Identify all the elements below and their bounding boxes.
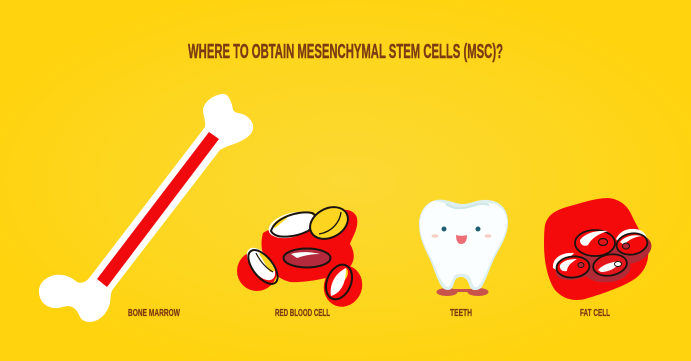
right blush: [484, 234, 492, 238]
red marrow bar: [97, 132, 219, 287]
top right fat cell: [615, 229, 649, 257]
tooth body: [419, 200, 508, 290]
left blush: [432, 234, 438, 238]
bone shape: [39, 94, 253, 322]
bottom left fat cell: [553, 253, 590, 279]
right eye: [476, 226, 480, 232]
label: red blood cell: RED BLOOD CELL: [275, 307, 330, 319]
label: teeth: TEETH: [450, 307, 472, 319]
red blob backdrop: [262, 210, 357, 282]
icon: bone with marrow: [39, 94, 253, 322]
center cell: [284, 248, 330, 268]
icon: fat cells: [544, 198, 651, 300]
gum middle: [450, 289, 476, 292]
label: fat cell: FAT CELL: [580, 307, 610, 319]
mouth: [456, 235, 467, 244]
tooth highlight: [420, 201, 507, 287]
label: bone marrow: BONE MARROW: [128, 307, 180, 319]
left eye: [442, 226, 446, 232]
bottom center fat cell: [591, 252, 629, 278]
dark red cell shadows: [556, 236, 651, 282]
top center fat cell: [575, 230, 615, 256]
icon: smiling tooth: [419, 200, 508, 296]
gum left: [436, 288, 458, 296]
bottom right cell shadow: [318, 260, 368, 312]
top left cell: [266, 207, 318, 243]
icon: red blood cells: [237, 201, 368, 312]
gum right: [468, 288, 488, 296]
red blob backdrop: [544, 198, 648, 300]
top right cell: [305, 201, 353, 245]
tooth crown shadow: [446, 204, 489, 208]
left cell: [241, 243, 283, 289]
left cell shadow: [237, 251, 277, 291]
bottom right cell: [321, 261, 357, 303]
